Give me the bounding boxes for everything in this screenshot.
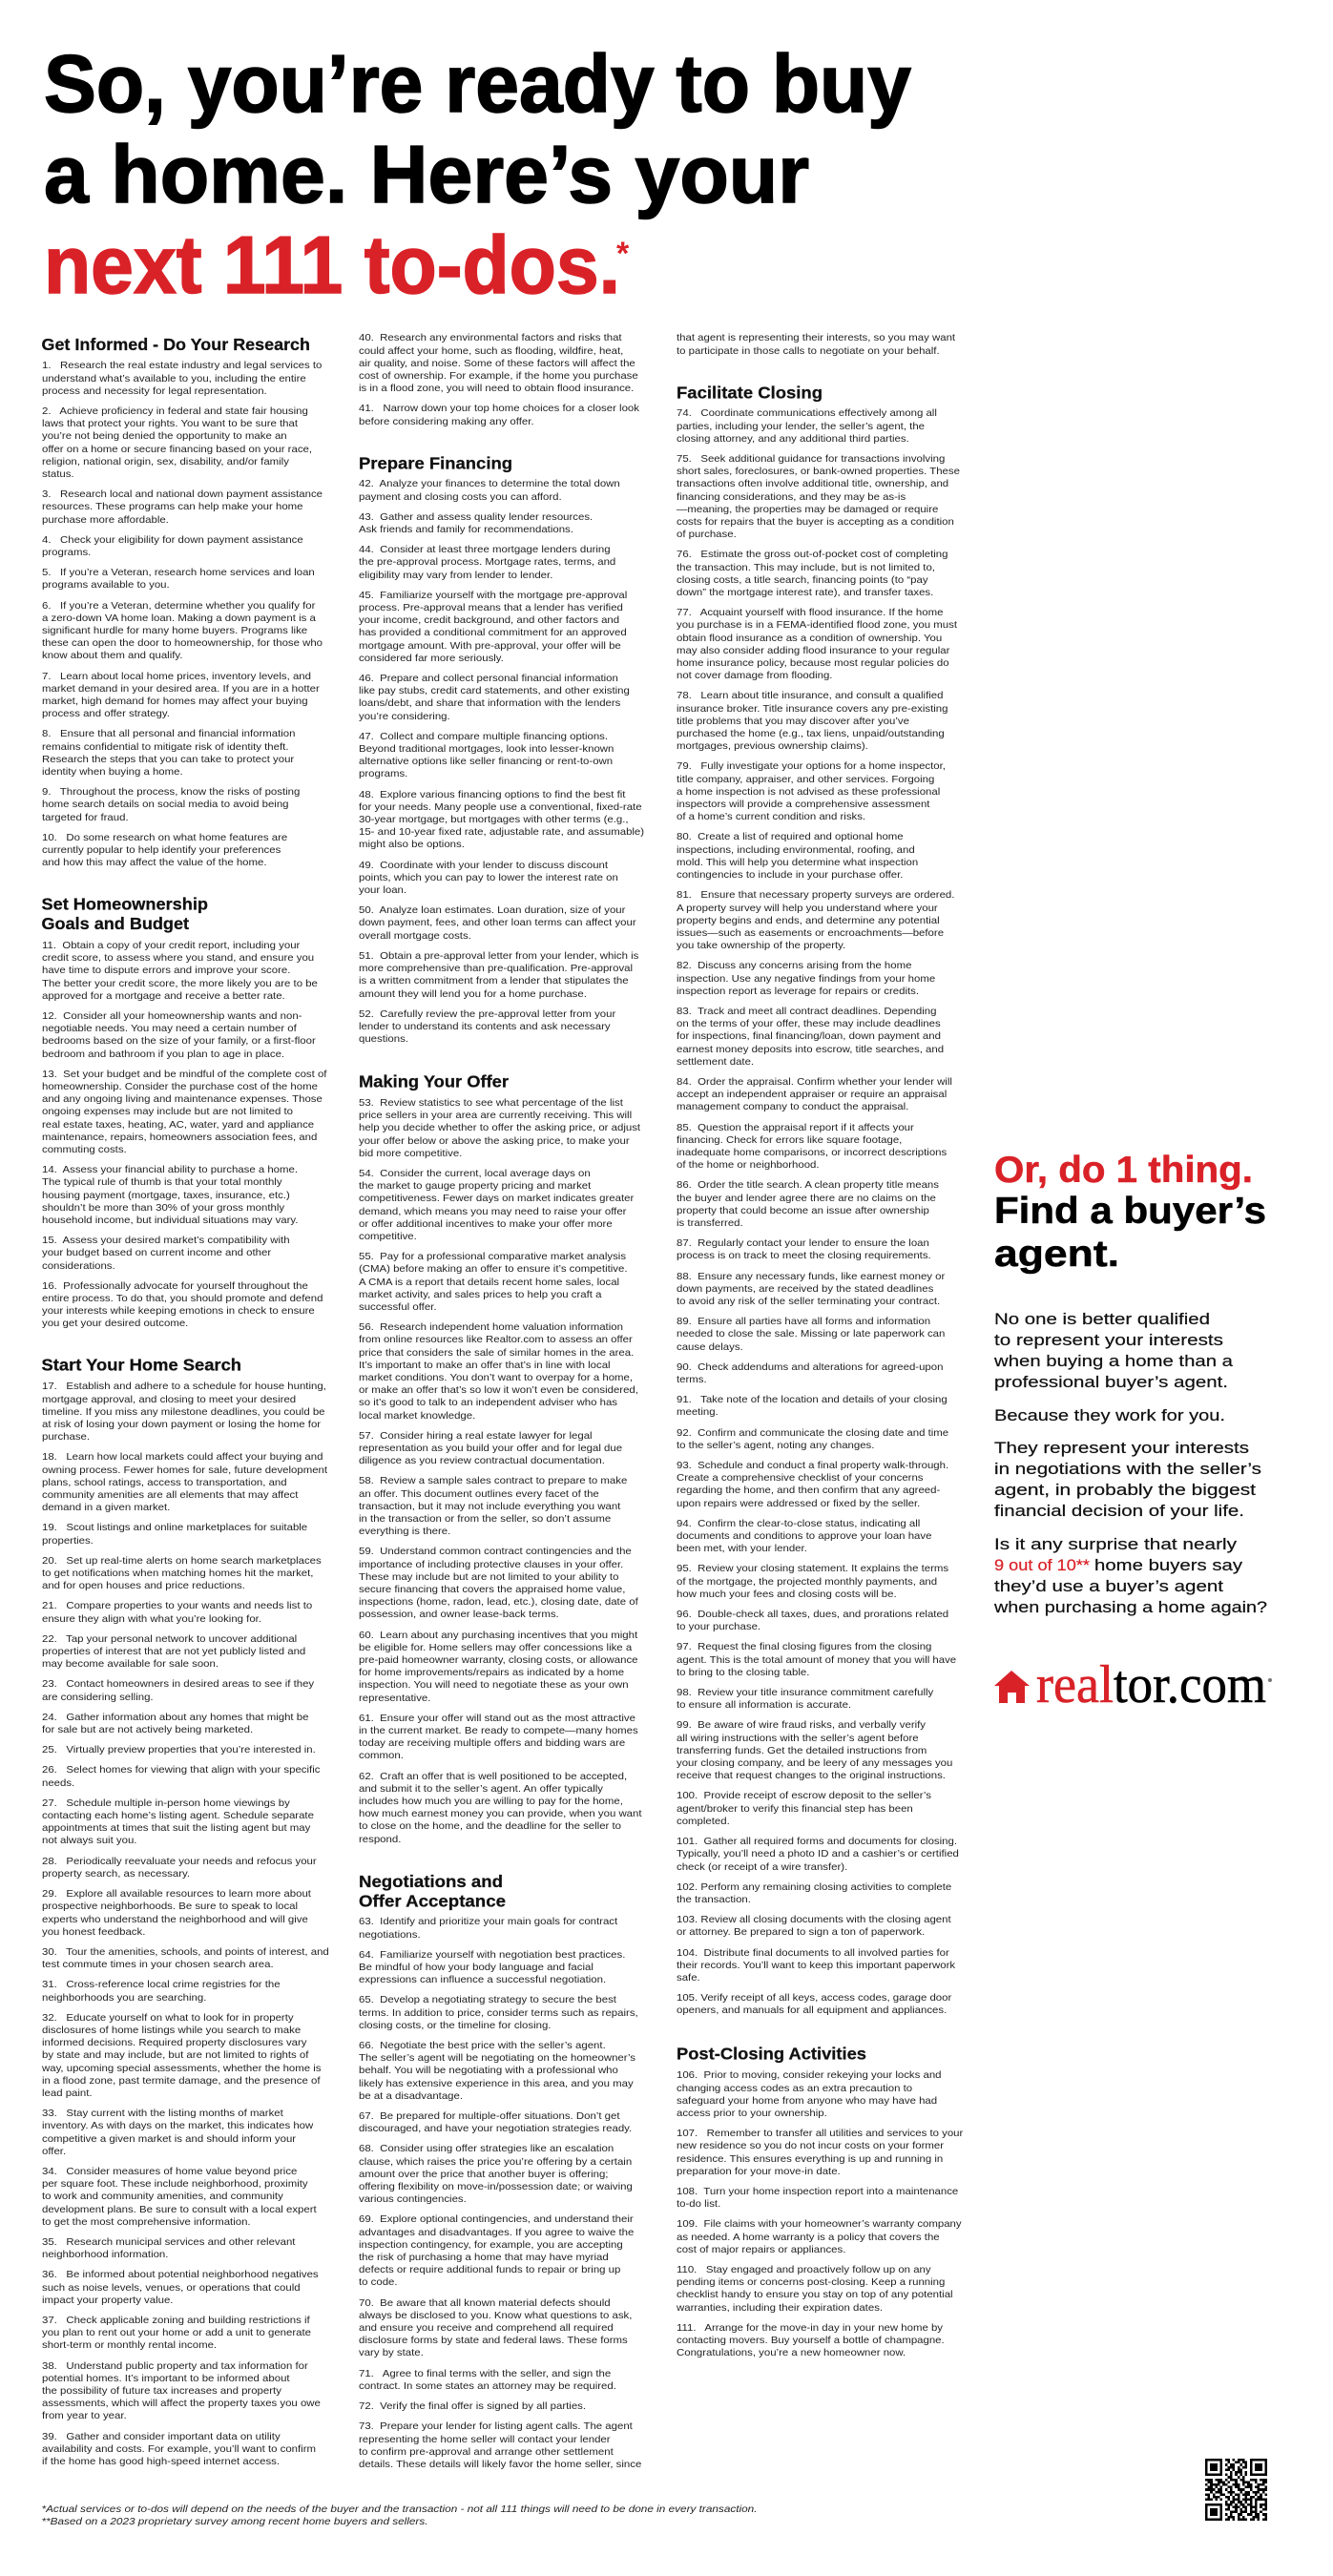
text block: Facilitate Closing items 74-105: 87. Regularly contact your lender to ensure the loan process is on track to meet the closing requirements. [677, 1238, 931, 1261]
text block: Facilitate Closing items 74-105: 80. Create a list of required and optional home inspections, including environmental, roofing, and mold. This will help you determine what inspection contingencies to include in your purchase offer. [677, 832, 918, 881]
text block: Post-Closing items 106-111: 108. Turn your home inspection report into a maintenance to-do list. [677, 2187, 958, 2210]
text block: Facilitate Closing items 74-105: 91. Take note of the location and details of your closing meeting. [677, 1395, 948, 1418]
side panel copy: financial decision of your life. [994, 1502, 1244, 1520]
text block: Home Search items 17-39: 19. Scout listings and online marketplaces for suitable properties. [42, 1523, 307, 1547]
text block: Facilitate Closing items 74-105: 79. Fully investigate your options for a home inspector, title company, appraiser, and other services. Forgoing a home inspection is not advised as these professional inspectors will provide a comprehensive assessment of a home’s current condition and risks. [677, 761, 946, 822]
text block: Home Search items 17-39: 32. Educate yourself on what to look for in property disclosures of home listings while you search to make informed decisions. Required property disclosures vary by state and may include, but are not limited to rights of way, upcoming special assessments, whether the home is in a flood zone, past termite damage, and the presence of lead paint. [42, 2013, 321, 2099]
text block: items 40-41 [359, 333, 639, 427]
text block: Home Search items 17-39: 38. Understand public property and tax information for potential homes. It’s important to be informed about the possibility of future tax increases and property assessments, which will affect the property taxes you owe from year to year. [42, 2361, 320, 2421]
text block: Facilitate Closing items 74-105: 85. Question the appraisal report if it affects your financing. Check for errors like square footage, inadequate home comparisons, or incorrect descriptions of the home or neighborhood. [677, 1123, 947, 1171]
text block: Prepare Financing items 42-52: 51. Obtain a pre-approval letter from your lender, which is more comprehensive than pre-qualification. Pre-approval is a written commitment from a lender that stipulates the amount they will lend you for a home purchase. [359, 951, 638, 1000]
text block: Home Search items 17-39: 36. Be informed about potential neighborhood negatives such as noise levels, venues, or operations that could impact your property value. [42, 2270, 318, 2306]
text block: Post-Closing items 106-111: 106. Prior to moving, consider rekeying your locks and changing access codes as an extra precaution to safeguard your home from anyone who may have had access prior to your ownership. [677, 2070, 942, 2119]
text block: Get Informed items 1-10: 1. Research the real estate industry and legal services to understand what’s available to you, including the entire process and necessity for legal representation. [42, 361, 322, 397]
heading: Post-Closing Activities: Post-Closing Activities [677, 2044, 866, 2063]
heading: Negotiations and Offer Acceptance: Negotiations and [359, 1872, 503, 1891]
heading: Negotiations and Offer Acceptance [359, 1872, 506, 1910]
text block: Home Search items 17-39: 17. Establish and adhere to a schedule for house hunting, mortgage approval, and closing to meet your desired timeline. If you miss any milestone deadlines, you could be at risk of losing your down payment or losing the home for purchase. [42, 1381, 325, 1443]
text block: Post-Closing items 106-111: 110. Stay engaged and proactively follow up on any pending items or concerns post-closing. Keep a running checklist handy to ensure you stay on top of any potential warranties, including their expiration dates. [677, 2265, 953, 2314]
footnotes: **Based on a 2023 proprietary survey among recent home buyers and sellers. [42, 2517, 427, 2527]
text block: Home Search items 17-39: 18. Learn how local markets could affect your buying and owning process. Fewer homes for sale, future development plans, school ratings, access to transportation, and community amenities are all elements that may affect demand in a given market. [42, 1452, 327, 1513]
text block: Home Search items 17-39: 39. Gather and consider important data on utility availability and costs. For example, you’ll want to confirm if the home has good high-speed internet access. [42, 2432, 315, 2467]
heading: Set Homeownership Goals and Budget: Goals and Budget [42, 914, 189, 933]
text block: Negotiations items 63-73: 64. Familiarize yourself with negotiation best practices. Be mindful of how your body language and facial expressions can influence a successful negotiation. [359, 1950, 625, 1985]
side panel copy: Because they work for you. [994, 1406, 1225, 1424]
text block: Facilitate Closing items 74-105: 105. Verify receipt of all keys, access codes, garage door openers, and manuals for all equipment and appliances. [677, 1993, 951, 2016]
text block: Facilitate Closing items 74-105: 83. Track and meet all contract deadlines. Depending on the terms of your offer, these may include deadlines for inspections, final financing/loan, down payment and earnest money deposits into escrow, title searches, and settlement date. [677, 1007, 944, 1068]
text block: Home Search items 17-39: 23. Contact homeowners in desired areas to see if they are considering selling. [42, 1679, 314, 1703]
text block: Negotiations items 63-73: 70. Be aware that all known material defects should always be disclosed to you. Know what questions to ask, and ensure you receive and comprehend all required disclosure forms by state and federal laws. These forms vary by state. [359, 2298, 632, 2358]
text block: Facilitate Closing items 74-105: 78. Learn about title insurance, and consult a qualified insurance broker. Title insurance covers any pre-existing title problems that you may discover after you’ve purchased the home (e.g., tax liens, unpaid/outstanding mortgages, previous ownership claims). [677, 691, 948, 752]
text block: Get Informed items 1-10: 8. Ensure that all personal and financial information remains confidential to mitigate risk of identity theft. Research the steps that you can take to protect your identity when buying a home. [42, 729, 295, 778]
text block: Get Informed items 1-10: 5. If you’re a Veteran, research home services and loan programs available to you. [42, 568, 314, 591]
text block: Making Your Offer items 53-62: 62. Craft an offer that is well positioned to be accepted, and submit it to the seller’s agent. An offer typically includes how much you are willing to pay for the home, how much earnest money you can provide, when you want to close on the home, and the deadline for the seller to respond. [359, 1772, 642, 1845]
text block: Home Search items 17-39: 21. Compare properties to your wants and needs list to ensure they align with what you’re looking for. [42, 1601, 312, 1625]
text block: Home Search items 17-39: 30. Tour the amenities, schools, and points of interest, and test commute times in your chosen search area. [42, 1947, 328, 1970]
text block: Negotiations items 63-73 [359, 1917, 641, 2470]
text block: Home Search items 17-39: 27. Schedule multiple in-person home viewings by contacting each home’s listing agent. Schedule separate appointments at times that suit the listing agent but may not always suit you. [42, 1798, 313, 1846]
icon: realtor.com house [994, 1671, 1030, 1703]
text block: Negotiations items 63-73: 67. Be prepared for multiple-offer situations. Don’t get discouraged, and have your negotiation strategies ready. [359, 2111, 632, 2134]
text block: Making Your Offer items 53-62 [359, 1098, 642, 1845]
text block: Facilitate Closing items 74-105: 94. Confirm the clear-to-close status, indicating all documents and conditions to approve your loan have been met, with your lender. [677, 1519, 931, 1554]
text block: Facilitate Closing items 74-105: 86. Order the title search. A clean property title means the buyer and lender agree there are no claims on the property that could become an issue after ownership is transferred. [677, 1180, 939, 1229]
text block: Facilitate Closing items 74-105: 84. Order the appraisal. Confirm whether your lender will accept an independent appraiser or require an appraisal management company to conduct the appraisal. [677, 1077, 952, 1112]
text block: Facilitate Closing items 74-105: 101. Gather all required forms and documents for closing. Typically, you’ll need a photo ID and a cashier’s or certified check (or receipt of a wire transfer). [677, 1837, 959, 1872]
text block: Negotiations items 63-73: 73. Prepare your lender for listing agent calls. The agent representing the home seller will contact your lender to confirm pre-approval and arrange other settlement details. These details will likely favor the home seller, since [359, 2421, 641, 2470]
text block: item 73 continued: that agent is representing their interests, so you may want to participate in those calls to negotiate on your behalf. [677, 333, 955, 357]
text block: Facilitate Closing items 74-105: 90. Check addendums and alterations for agreed-upon terms. [677, 1362, 943, 1385]
text block: Prepare Financing items 42-52: 44. Consider at least three mortgage lenders during the pre-approval process. Mortgage rates, terms, and eligibility may vary from lender to lender. [359, 545, 615, 581]
text block: Facilitate Closing items 74-105: 82. Discuss any concerns arising from the home inspection. Use any negative findings from your home inspection report as leverage for repairs or credits. [677, 961, 935, 997]
text block: Making Your Offer items 53-62: 57. Consider hiring a real estate lawyer for legal representation as you build your offer and for legal due diligence as you review contractual documentation. [359, 1431, 622, 1466]
text block: Facilitate Closing items 74-105: 97. Request the final closing figures from the closing agent. This is the total amount of money that you will have to bring to the closing table. [677, 1642, 956, 1678]
text block: Facilitate Closing items 74-105: 88. Ensure any necessary funds, like earnest money or down payments, are received by the stated deadlines to avoid any risk of the seller terminating your contract. [677, 1272, 945, 1307]
text block: Facilitate Closing items 74-105: 75. Seek additional guidance for transactions involving short sales, foreclosures, or bank-owned properties. These transactions often involve additional title, ownership, and financing considerations, and they may be as-is —meaning, the properties may be damaged or require costs for repairs that the buyer is accepting as a condition of purchase. [677, 454, 960, 540]
side panel copy: in negotiations with the seller’s [994, 1460, 1261, 1478]
text block: Get Informed items 1-10: 2. Achieve proficiency in federal and state fair housing laws that protect your rights. You want to be sure that you’re not being denied the opportunity to make an offer on a home or secure financing based on your race, religion, national origin, sex, disability, and/or family status. [42, 406, 312, 480]
QR code [1205, 2459, 1267, 2521]
text block: Negotiations items 63-73: 71. Agree to final terms with the seller, and sign the contract. In some states an attorney may be required. [359, 2369, 616, 2392]
side panel heading: Or, do 1 thing: Find a buyer’s [994, 1191, 1266, 1232]
text block: Get Informed items 1-10: 3. Research local and national down payment assistance resources. These programs can help make your home purchase more affordable. [42, 489, 323, 526]
text block: Prepare Financing items 42-52: 43. Gather and assess quality lender resources. Ask friends and family for recommendations. [359, 512, 593, 535]
side panel copy: 9 out of 10** [994, 1556, 1090, 1574]
text block: Facilitate Closing items 74-105: 92. Confirm and communicate the closing date and time to the seller’s agent, noting any changes. [677, 1428, 948, 1451]
text block: Prepare Financing items 42-52 [359, 479, 644, 1045]
text block: Making Your Offer items 53-62: 58. Review a sample sales contract to prepare to make an offer. This document outlines every facet of the transaction, but it may not include everything you want in the transaction or from the seller, so don’t assume everything is there. [359, 1476, 627, 1537]
text block: Prepare Financing items 42-52: 49. Coordinate with your lender to discuss discount points, which you can pay to lower the interest rate on your loan. [359, 861, 618, 896]
text block: Home Search items 17-39: 22. Tap your personal network to uncover additional properties of interest that are not yet publicly listed and may become available for sale soon. [42, 1634, 305, 1670]
text block: Homeownership Goals items 11-16: 15. Assess your desired market’s compatibility with your budget based on current income and other considerations. [42, 1236, 289, 1272]
text block: Negotiations items 63-73: 65. Develop a negotiating strategy to secure the best terms. In addition to price, consider terms such as repairs, closing costs, or the timeline for closing. [359, 1995, 638, 2031]
text block: Home Search items 17-39 [42, 1381, 328, 2467]
text block: Facilitate Closing items 74-105: 98. Review your title insurance commitment carefully to ensure all information is accurate. [677, 1688, 933, 1711]
text block: Prepare Financing items 42-52: 45. Familiarize yourself with the mortgage pre-approval process. Pre-approval means that a lender has verified your income, credit background, and other factors and has provided a conditional commitment for an approved mortgage amount. With pre-approval, your offer will be considered far more seriously. [359, 591, 627, 664]
title: next 111 to-dos. [44, 220, 620, 311]
text block: Home Search items 17-39: 26. Select homes for viewing that align with your specific needs. [42, 1765, 320, 1789]
text block: Facilitate Closing items 74-105: 93. Schedule and conduct a final property walk-through. Create a comprehensive checklist of your concerns regarding the home, and then confirm that any agreed- upon repairs were addressed or fixed by the seller. [677, 1461, 948, 1509]
title: a home. Here’s your [44, 130, 809, 220]
text block: Get Informed items 1-10: 9. Throughout the process, know the risks of posting home search details on social media to avoid being targeted for fraud. [42, 787, 300, 823]
text block: Home Search items 17-39: 28. Periodically reevaluate your needs and refocus your property search, as necessary. [42, 1857, 316, 1880]
heading: Facilitate Closing: Facilitate Closing [677, 384, 823, 403]
text block: Prepare Financing items 42-52: 48. Explore various financing options to find the best fit for your needs. Many people use a conventional, fixed-rate 30-year mortgage, but mortgages with other terms (e.g., 15- and 10-year fixed rate, adjustable rate, and assumable) might also be options. [359, 790, 644, 850]
text block: Prepare Financing items 42-52: 46. Prepare and collect personal financial information like pay stubs, credit card statements, and other existing loans/debt, and share that information with the lenders you’re considering. [359, 674, 630, 722]
text block: Facilitate Closing items 74-105 [677, 408, 960, 2016]
side panel copy: when buying a home than a [993, 1352, 1234, 1370]
text block: Prepare Financing items 42-52: 52. Carefully review the pre-approval letter from your lender to understand its contents and ask necessary questions. [359, 1009, 615, 1045]
text block: Get Informed items 1-10: 10. Do some research on what home features are currently popular to help identify your preferences and how this may affect the value of the home. [42, 833, 287, 868]
text block: Post-Closing items 106-111: 111. Arrange for the move-in day in your new home by contacting movers. Buy yourself a bottle of champagne. Congratulations, you’re a new homeowner now. [677, 2323, 945, 2358]
text block: Homeownership Goals items 11-16: 16. Professionally advocate for yourself throughout the entire process. To do that, you should promote and defend your interests while keeping emotions in check to ensure you get your desired outcome. [42, 1281, 323, 1329]
text block: Facilitate Closing items 74-105: 100. Provide receipt of escrow deposit to the seller’s agent/broker to verify this financial step has been completed. [677, 1791, 931, 1827]
logo: realtor.com: tor.com [1114, 1655, 1266, 1714]
side panel copy: No one is better qualified [994, 1310, 1210, 1328]
text block: Making Your Offer items 53-62: 54. Consider the current, local average days on the market to gauge property pricing and market competitiveness. Fewer days on market indicates greater demand, which means you may need to raise your offer or offer additional incentives to make your offer more competitive. [359, 1169, 634, 1242]
side panel heading: Or, do 1 thing: Or, do 1 thing. [994, 1150, 1253, 1191]
heading: Set Homeownership Goals and Budget: Set Homeownership [42, 895, 208, 914]
text block: items 40-41: 40. Research any environmental factors and risks that could affect your home, such as flooding, wildfire, heat, air quality, and noise. Some of these factors will affect the cost of ownership. For example, if the home you purchase is in a flood zone, you will need to obtain flood insurance. [359, 333, 638, 394]
text block: Facilitate Closing items 74-105: 77. Acquaint yourself with flood insurance. If the home you purchase is in a FEMA-identified flood zone, you must obtain flood insurance as a condition of ownership. You may also consider adding flood insurance to your regular home insurance policy, because most regular policies do not cover damage from flooding. [677, 608, 957, 681]
text block: Home Search items 17-39: 29. Explore all available resources to learn more about prospective neighborhoods. Be sure to speak to local experts who understand the neighborhood and will give you honest feedback. [42, 1889, 310, 1938]
title: * [616, 236, 630, 272]
text block: Facilitate Closing items 74-105: 96. Double-check all taxes, dues, and prorations related to your purchase. [677, 1610, 948, 1632]
logo: realtor.com [1036, 1655, 1272, 1714]
heading: Making Your Offer: Making Your Offer [359, 1072, 509, 1091]
text block: Making Your Offer items 53-62: 61. Ensure your offer will stand out as the most attractive in the current market. Be ready to compete—many homes today are receiving multiple offers and bidding wars are common. [359, 1714, 638, 1761]
text block: Home Search items 17-39: 33. Stay current with the listing months of market inventory. As with days on the market, this indicates how competitive a given market is and should inform your offer. [42, 2109, 313, 2157]
text block: Get Informed items 1-10: 4. Check your eligibility for down payment assistance programs. [42, 535, 302, 558]
text block: Negotiations items 63-73: 72. Verify the final offer is signed by all parties. [359, 2401, 586, 2412]
text block: Homeownership Goals items 11-16: 12. Consider all your homeownership wants and non- negotiable needs. You may need a certain number of bedrooms based on the size of your family, or a first-floor bedroom and bathroom if you plan to age in place. [42, 1011, 315, 1060]
text block: Facilitate Closing items 74-105: 74. Coordinate communications effectively among all parties, including your lender, the seller’s agent, the closing attorney, and any additional third parties. [677, 408, 937, 445]
heading: Get Informed: Get Informed - Do Your Research [42, 335, 310, 354]
logo: realtor.com: real [1036, 1655, 1114, 1714]
title: So, you’re ready to buy [44, 39, 911, 130]
text block: items 40-41: 41. Narrow down your top home choices for a closer look before considering making any offer. [359, 404, 639, 427]
footnotes [42, 2504, 758, 2527]
text block: Facilitate Closing items 74-105: 89. Ensure all parties have all forms and information needed to close the sale. Missing or late paperwork can cause delays. [677, 1317, 945, 1353]
text block: Facilitate Closing items 74-105: 95. Review your closing statement. It explains the terms of the mortgage, the projected monthly payments, and how much your fees and closing costs will be. [677, 1564, 948, 1600]
text block: Facilitate Closing items 74-105: 103. Review all closing documents with the closing agent or attorney. Be prepared to sign a ton of paperwork. [677, 1915, 951, 1938]
side panel copy: home buyers say [1094, 1556, 1243, 1574]
footnotes: *Actual services or to-dos will depend on the needs of the buyer and the transaction - not all 111 things will need to be done in every transaction. [42, 2504, 758, 2515]
text block: Making Your Offer items 53-62: 55. Pay for a professional comparative market analysis (CMA) before making an offer to ensure it’s competitive. A CMA is a report that details recent home sales, local market activity, and sales prices to help you craft a successful offer. [359, 1252, 628, 1313]
side panel copy: when purchasing a home again? [993, 1598, 1267, 1616]
side panel copy: agent, in probably the biggest [994, 1481, 1256, 1499]
heading: Set Homeownership Goals and Budget [42, 895, 208, 933]
text block: Post-Closing items 106-111 [677, 2070, 964, 2358]
text block: Post-Closing items 106-111: 109. File claims with your homeowner’s warranty company as needed. A home warranty is a policy that covers the cost of major repairs or appliances. [677, 2219, 962, 2255]
side panel copy: professional buyer’s agent. [994, 1373, 1228, 1391]
text block: Home Search items 17-39: 34. Consider measures of home value beyond price per square foot. These include neighborhood, proximity to work and community amenities, and community development plans. Be sure to consult with a local expert to get the most comprehensive information. [42, 2167, 316, 2228]
side panel copy [993, 1310, 1267, 1616]
side panel heading: Or, do 1 thing: agent. [994, 1234, 1119, 1275]
heading: Start Your Home Search: Start Your Home Search [42, 1355, 241, 1374]
side panel heading: Or, do 1 thing [994, 1150, 1266, 1275]
text block: Facilitate Closing items 74-105: 99. Be aware of wire fraud risks, and verbally verify all wiring instructions with the seller’s agent before transferring funds. Get the detailed instructions from your closing company, and be leery of any messages you receive that request changes to the original instructions. [677, 1720, 952, 1781]
text block: Facilitate Closing items 74-105: 104. Distribute final documents to all involved parties for their records. You’ll want to keep this important paperwork safe. [677, 1948, 955, 1984]
text block: Get Informed items 1-10 [42, 361, 323, 868]
side panel copy: to represent your interests [994, 1331, 1223, 1349]
text block: Negotiations items 63-73: 69. Explore optional contingencies, and understand their advantages and disadvantages. If you agree to waive the inspection contingency, for example, you are accepting the risk of purchasing a home that may have myriad defects or require additional funds to repair or bring up to code. [359, 2214, 634, 2288]
text block: Making Your Offer items 53-62: 60. Learn about any purchasing incentives that you might be eligible for. Home sellers may offer concessions like a pre-paid homeowner warranty, closing costs, or allowance for home improvements/repairs as indicated by a home inspection. You will need to negotiate these as your own representative. [359, 1631, 637, 1704]
side panel copy: they’d use a buyer’s agent [994, 1577, 1223, 1595]
text block: Facilitate Closing items 74-105: 102. Perform any remaining closing activities to complete the transaction. [677, 1882, 951, 1905]
text block: Homeownership Goals items 11-16: 13. Set your budget and be mindful of the complete cost of homeownership. Consider the purchase cost of the home and any ongoing living and maintenance expenses. Those ongoing expenses may include but are not limited to real estate taxes, heating, AC, water, yard and appliance maintenance, repairs, homeowners association fees, and commuting costs. [42, 1070, 326, 1155]
heading: Prepare Financing: Prepare Financing [359, 454, 512, 473]
text block: Prepare Financing items 42-52: 42. Analyze your finances to determine the total down payment and closing costs you can afford. [359, 479, 620, 503]
text block: Facilitate Closing items 74-105: 76. Estimate the gross out-of-pocket cost of completing the transaction. This may include, but is not limited to, closing costs, a title search, financing points (to “pay down” the mortgage interest rate), and transfer taxes. [677, 550, 948, 598]
text block: Negotiations items 63-73: 63. Identify and prioritize your main goals for contract negotiations. [359, 1917, 617, 1941]
text block: Home Search items 17-39: 31. Cross-reference local crime registries for the neighborhoods you are searching. [42, 1980, 280, 2004]
text block: Homeownership Goals items 11-16: 11. Obtain a copy of your credit report, including your credit score, to assess where you stand, and ensure you have time to dispute errors and improve your score. The better your credit score, the more likely you are to be approved for a mortgage and receive a better rate. [42, 941, 317, 1002]
text block: Negotiations items 63-73: 68. Consider using offer strategies like an escalation clause, which raises the price you’re offering by a certain amount over the price that another buyer is offering; offering flexibility on move-in/possession date; or waiving various contingencies. [359, 2144, 633, 2205]
text block: Making Your Offer items 53-62: 53. Review statistics to see what percentage of the list price sellers in your area are currently receiving. This will help you decide whether to offer the asking price, or adjust your offer below or above the asking price, to make your bid more competitive. [359, 1098, 640, 1159]
text block: Post-Closing items 106-111: 107. Remember to transfer all utilities and services to your new residence so you do not incur costs on your former residence. This ensures everything is up and running in preparation for your move-in date. [677, 2129, 963, 2177]
text block: Negotiations items 63-73: 66. Negotiate the best price with the seller’s agent. The seller’s agent will be negotiating on the homeowner’s behalf. You will be negotiating with a professional who likely has extensive experience in this area, and you may be at a disadvantage. [359, 2041, 635, 2102]
text block: Home Search items 17-39: 24. Gather information about any homes that might be for sale but are not actively being marketed. [42, 1713, 308, 1735]
text block: Home Search items 17-39: 20. Set up real-time alerts on home search marketplaces to get notifications when matching homes hit the market, and for open houses and price reductions. [42, 1556, 321, 1591]
text block: Facilitate Closing items 74-105: 81. Ensure that necessary property surveys are ordered. A property survey will help you understand where your property begins and ends, and determine any potential issues—such as easements or encroachments—before you take ownership of the property. [677, 890, 954, 951]
text block: Get Informed items 1-10: 7. Learn about local home prices, inventory levels, and market demand in your desired area. If you are in a hotter market, high demand for homes may affect your buying process and offer strategy. [42, 672, 319, 719]
heading: Negotiations and Offer Acceptance: Offer Acceptance [359, 1891, 506, 1910]
side panel copy: They represent your interests [994, 1439, 1249, 1457]
text block: Prepare Financing items 42-52: 50. Analyze loan estimates. Loan duration, size of your down payment, fees, and other loan terms can affect your overall mortgage costs. [359, 905, 636, 942]
text block: Home Search items 17-39: 35. Research municipal services and other relevant neighborhood information. [42, 2237, 295, 2260]
text block: Prepare Financing items 42-52: 47. Collect and compare multiple financing options. Beyond traditional mortgages, look into lesser-known alternative options like seller financing or rent-to-own programs. [359, 732, 614, 779]
text block: Making Your Offer items 53-62: 56. Research independent home valuation information from online resources like Realtor.com to assess an offer price that considers the sale of similar homes in the area. It’s important to make an offer that’s in line with local market conditions. You don’t want to overpay for a home, or make an offer that’s so low it won’t even be considered, so it’s good to talk to an independent adviser who has local market knowledge. [359, 1322, 638, 1422]
text block: Get Informed items 1-10: 6. If you’re a Veteran, determine whether you qualify for a zero-down VA home loan. Making a down payment is a significant hurdle for many home buyers. Programs like these can open the door to homeownership, for those who know about them and qualify. [42, 601, 323, 661]
text block: Home Search items 17-39: 37. Check applicable zoning and building restrictions if you plan to rent out your home or add a unit to generate short-term or monthly rental income. [42, 2316, 310, 2351]
side panel copy: Is it any surprise that nearly [994, 1535, 1238, 1553]
text block: Home Search items 17-39: 25. Virtually preview properties that you’re interested in. [42, 1745, 315, 1755]
text block: Homeownership Goals items 11-16 [42, 941, 326, 1329]
title [44, 39, 911, 311]
text block: Making Your Offer items 53-62: 59. Understand common contract contingencies and the importance of including protective clauses in your offer. These may include but are not limited to your ability to secure financing that covers the appraised home value, inspections (home, radon, lead, etc.), closing date, date of possession, and owner lease-back terms. [359, 1547, 638, 1620]
text block: Homeownership Goals items 11-16: 14. Assess your financial ability to purchase a home. The typical rule of thumb is that your total monthly housing payment (mortgage, taxes, insurance, etc.) shouldn’t be more than 30% of your gross monthly household income, but individual situations may vary. [42, 1165, 298, 1226]
